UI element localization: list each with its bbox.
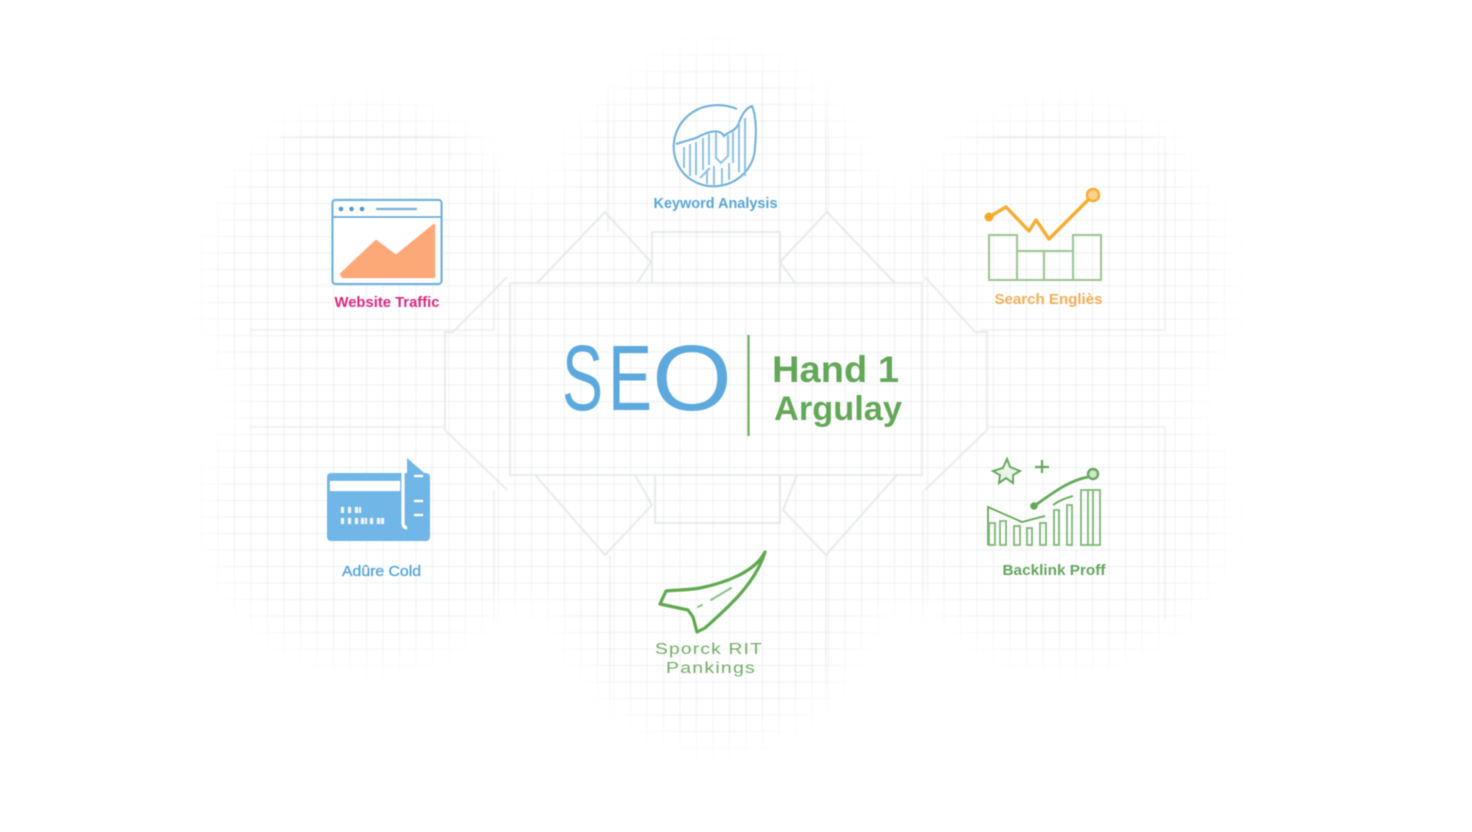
node: search engines [984,189,1102,308]
label: Sporck RIT: Sporck RIT [655,641,763,658]
node: backlink profile [988,459,1107,579]
title: SEO [562,326,732,430]
center logo [562,326,902,436]
node: website traffic [332,200,442,311]
icon: browser window [332,200,442,284]
icon: line over bars [984,189,1101,280]
background grid [218,70,1209,732]
node: rankings [655,552,765,677]
SEO hub infographic [218,70,1209,732]
node: keyword analysis [654,105,778,212]
label: Search Engines: Search Engliѐs [994,291,1102,308]
node: adure cold [327,458,430,580]
icon: paper plane [660,552,765,632]
title: SEO: S [562,326,603,430]
subtitle: Hand 1: Hand 1 [772,349,899,390]
divider [747,335,750,436]
label: Adure Cold: Adûre Cold [342,564,421,580]
label: Backlink Proff: Backlink Proff [1002,562,1107,579]
icon: growth bars and sparkle [988,459,1100,545]
label: Website Traffic: Website Traffic [334,294,440,311]
icon: card and document [327,458,430,541]
label: Keyword Analysis: Keyword Analysis [654,195,778,212]
subtitle: Argulay: Argulay [774,390,902,428]
title: SEO: O [652,326,732,430]
label: Pankings: Pankings [666,660,756,677]
title: SEO: E [608,326,652,430]
icon: globe with chart [674,105,756,186]
hub and arrow outlines [252,122,1166,676]
